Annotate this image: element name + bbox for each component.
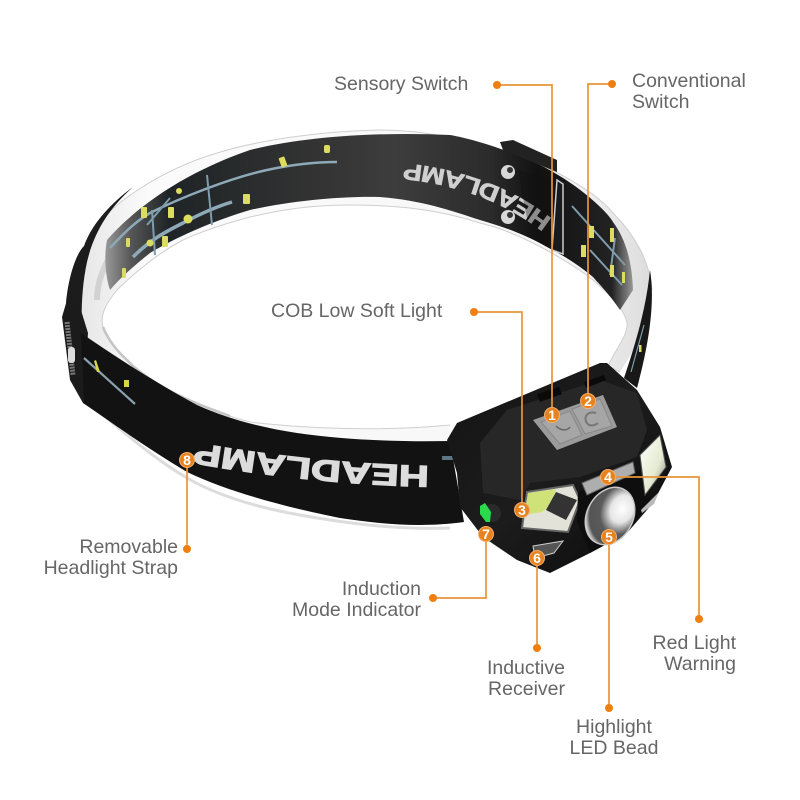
front plastic lower rim xyxy=(107,418,450,528)
clear plastic band xyxy=(80,130,652,442)
highlight LED bead xyxy=(576,479,644,553)
headband xyxy=(62,130,652,530)
callout: sensory switch xyxy=(334,73,560,423)
headlamp body xyxy=(447,363,672,573)
lens bezel xyxy=(577,470,650,553)
green indicator xyxy=(480,503,501,522)
callout: removable headlight strap: Removable xyxy=(79,536,178,558)
far right strap sliver xyxy=(624,270,652,388)
front strap xyxy=(81,333,464,525)
callout: COB low soft light xyxy=(271,300,530,518)
callout: induction mode indicator: Induction xyxy=(342,578,421,600)
left outer strap sliver xyxy=(66,187,133,333)
clasp and rivets xyxy=(500,140,563,254)
back strap reflected pattern xyxy=(110,145,625,285)
callout: sensory switch: 1 xyxy=(548,407,556,423)
top facet xyxy=(480,380,647,500)
left buckle xyxy=(62,300,88,403)
inductive receiver window xyxy=(533,541,563,558)
callout: removable headlight strap: 8 xyxy=(183,452,191,468)
callout: inductive receiver xyxy=(487,550,565,700)
callout: COB low soft light: 3 xyxy=(518,502,526,518)
small side lens xyxy=(641,492,659,513)
callout: red light warning xyxy=(600,469,737,675)
callout: removable headlight strap xyxy=(44,452,194,579)
callout: conventional switch xyxy=(580,70,746,409)
callout: red light warning: Red Light xyxy=(653,632,737,654)
callout: inductive receiver: Receiver xyxy=(488,678,565,700)
callout: conventional switch: 2 xyxy=(584,393,592,409)
callout: sensory switch: Sensory Switch xyxy=(334,73,468,95)
front strap blue line and marks xyxy=(84,358,456,460)
callout: highlight LED bead: LED Bead xyxy=(570,737,658,759)
body shell xyxy=(447,363,672,573)
COB light xyxy=(522,485,580,532)
switch vents xyxy=(537,387,562,402)
callout: highlight LED bead xyxy=(570,529,658,759)
front strap HEADLAMP print: HEADLAMP xyxy=(194,445,428,488)
callout: highlight LED bead: Highlight xyxy=(576,716,653,738)
callout: inductive receiver: 6 xyxy=(533,550,541,566)
red light warning window xyxy=(582,462,635,495)
callout: removable headlight strap: Headlight Strap xyxy=(44,557,178,579)
callout: induction mode indicator: Mode Indicator xyxy=(292,599,421,621)
right side light xyxy=(640,435,666,495)
callout: COB low soft light: COB Low Soft Light xyxy=(271,300,443,322)
callout: inductive receiver: Inductive xyxy=(487,657,565,679)
callout: red light warning: 4 xyxy=(604,469,612,485)
back strap inner side xyxy=(105,134,633,310)
callout: induction mode indicator: 7 xyxy=(482,526,490,542)
callout: induction mode indicator xyxy=(292,526,494,621)
callout: conventional switch: Conventional xyxy=(632,70,746,92)
callout: highlight LED bead: 5 xyxy=(605,529,613,545)
back strap HEADLAMP print: HEADLAMP xyxy=(404,164,551,231)
callout: conventional switch: Switch xyxy=(632,91,689,113)
button panel xyxy=(533,395,617,450)
callout: red light warning: Warning xyxy=(664,653,736,675)
